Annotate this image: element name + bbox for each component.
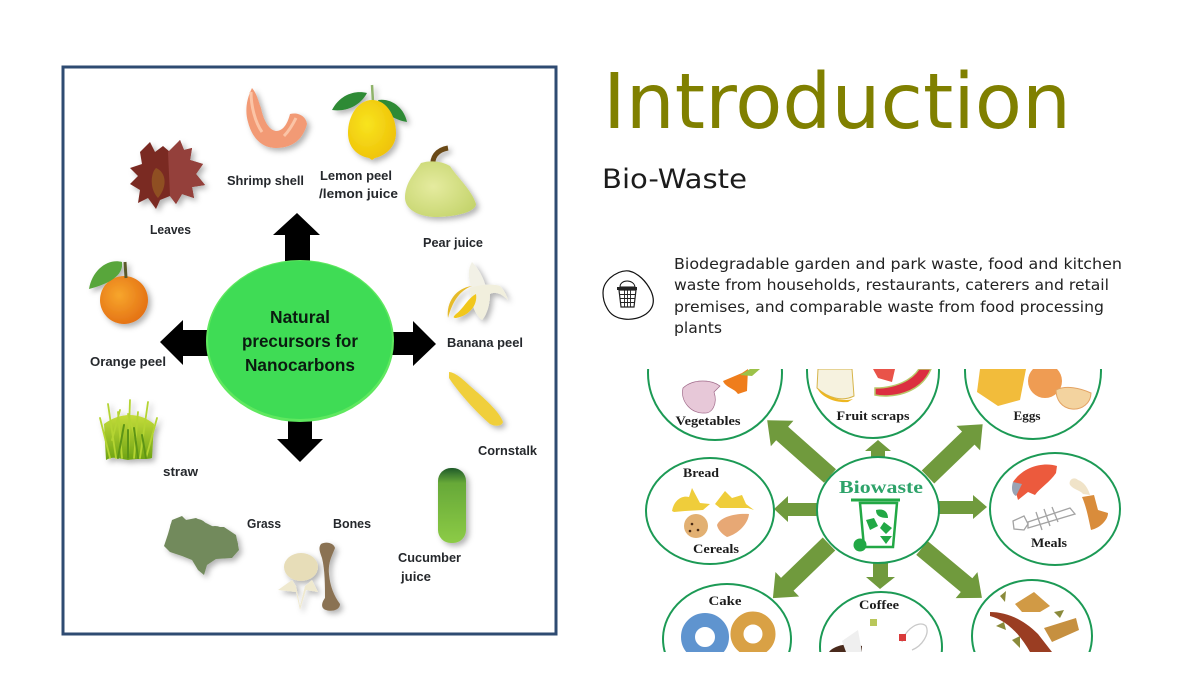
label: cornstalk: Cornstalk xyxy=(478,443,538,458)
icon: pear xyxy=(405,148,476,217)
arrow: to wood xyxy=(916,542,982,598)
arrow: to coffee xyxy=(866,562,895,589)
arrow: to meals xyxy=(938,495,987,519)
circle: coffee: Coffee xyxy=(859,598,900,612)
label: grass: Grass xyxy=(247,516,281,531)
arrow: up xyxy=(273,213,320,262)
label: shrimp shell: Shrimp shell xyxy=(227,173,304,188)
circle: eggs xyxy=(964,369,1102,440)
diagram: biowaste categories xyxy=(645,369,1121,652)
arrow: to cake xyxy=(772,538,836,598)
icon: cucumber xyxy=(438,468,466,543)
arrow: to fruit scraps xyxy=(865,440,891,456)
icon: trash basket in blob xyxy=(603,271,653,319)
arrow: to bread xyxy=(774,496,818,522)
icon: orange xyxy=(89,261,148,324)
arrow: down xyxy=(277,418,323,462)
circle: wood and yard waste xyxy=(971,579,1093,652)
central circle: precursors for xyxy=(242,331,358,351)
label: straw: straw xyxy=(163,464,199,479)
subtitle: Bio-Waste xyxy=(602,164,747,195)
circle: eggs: Eggs xyxy=(1014,409,1041,423)
text block: bio-waste definition: plants xyxy=(674,319,722,337)
circle: fruit scraps: Fruit scraps xyxy=(836,409,910,423)
icon: grass xyxy=(164,516,239,575)
central circle: Natural xyxy=(270,307,330,327)
icon: straw xyxy=(100,400,157,460)
icon: lemon xyxy=(332,85,407,160)
text block: bio-waste definition xyxy=(674,255,1122,337)
circle: coffee xyxy=(819,591,943,652)
arrow: to vegetables xyxy=(767,420,836,483)
circle: cake xyxy=(662,583,792,652)
title: Introduction xyxy=(603,58,1071,147)
circle: meals: Meals xyxy=(1031,536,1067,550)
label: lemon peel: Lemon peel xyxy=(320,168,392,183)
icon: shrimp xyxy=(246,88,307,148)
text block: bio-waste definition: Biodegradable garden and park waste, food and kitchen xyxy=(674,255,1122,273)
circle: bread and cereals xyxy=(646,458,774,564)
circle: bread and cereals: Bread xyxy=(683,466,719,480)
icon: cornstalk xyxy=(449,372,503,426)
label: juice: juice xyxy=(400,569,431,584)
circle: meals xyxy=(990,453,1120,565)
circle: vegetables: Vegetables xyxy=(676,414,741,428)
icon: leaves xyxy=(130,140,205,209)
central circle xyxy=(206,260,394,422)
central circle: Nanocarbons xyxy=(245,355,355,375)
label: cucumber: Cucumber xyxy=(398,550,461,565)
label: banana peel: Banana peel xyxy=(447,335,523,350)
arrow: left xyxy=(160,320,210,365)
label: orange peel: Orange peel xyxy=(90,354,166,369)
label: leaves: Leaves xyxy=(150,222,191,237)
circle: bread and cereals: Cereals xyxy=(693,542,739,556)
circle: cake: Cake xyxy=(708,594,742,608)
label: lemon juice: /lemon juice xyxy=(319,186,398,201)
circle: vegetables xyxy=(647,369,783,441)
text block: bio-waste definition: waste from households, restaurants, caterers and retail xyxy=(674,276,1109,294)
icon: banana xyxy=(448,262,508,320)
icon: green bin xyxy=(851,500,900,552)
circle: biowaste center: Biowaste xyxy=(839,477,923,497)
label: bones: Bones xyxy=(333,516,371,531)
label: pear juice: Pear juice xyxy=(423,235,483,250)
icon: bones xyxy=(278,543,340,611)
circle: biowaste center xyxy=(817,457,939,563)
panel: natural precursors for nanocarbons xyxy=(63,67,556,634)
arrow: to eggs xyxy=(922,424,983,484)
arrow: right xyxy=(390,321,436,366)
circle: fruit scraps xyxy=(806,369,940,439)
text block: bio-waste definition: premises, and comparable waste from food processing xyxy=(674,298,1104,316)
